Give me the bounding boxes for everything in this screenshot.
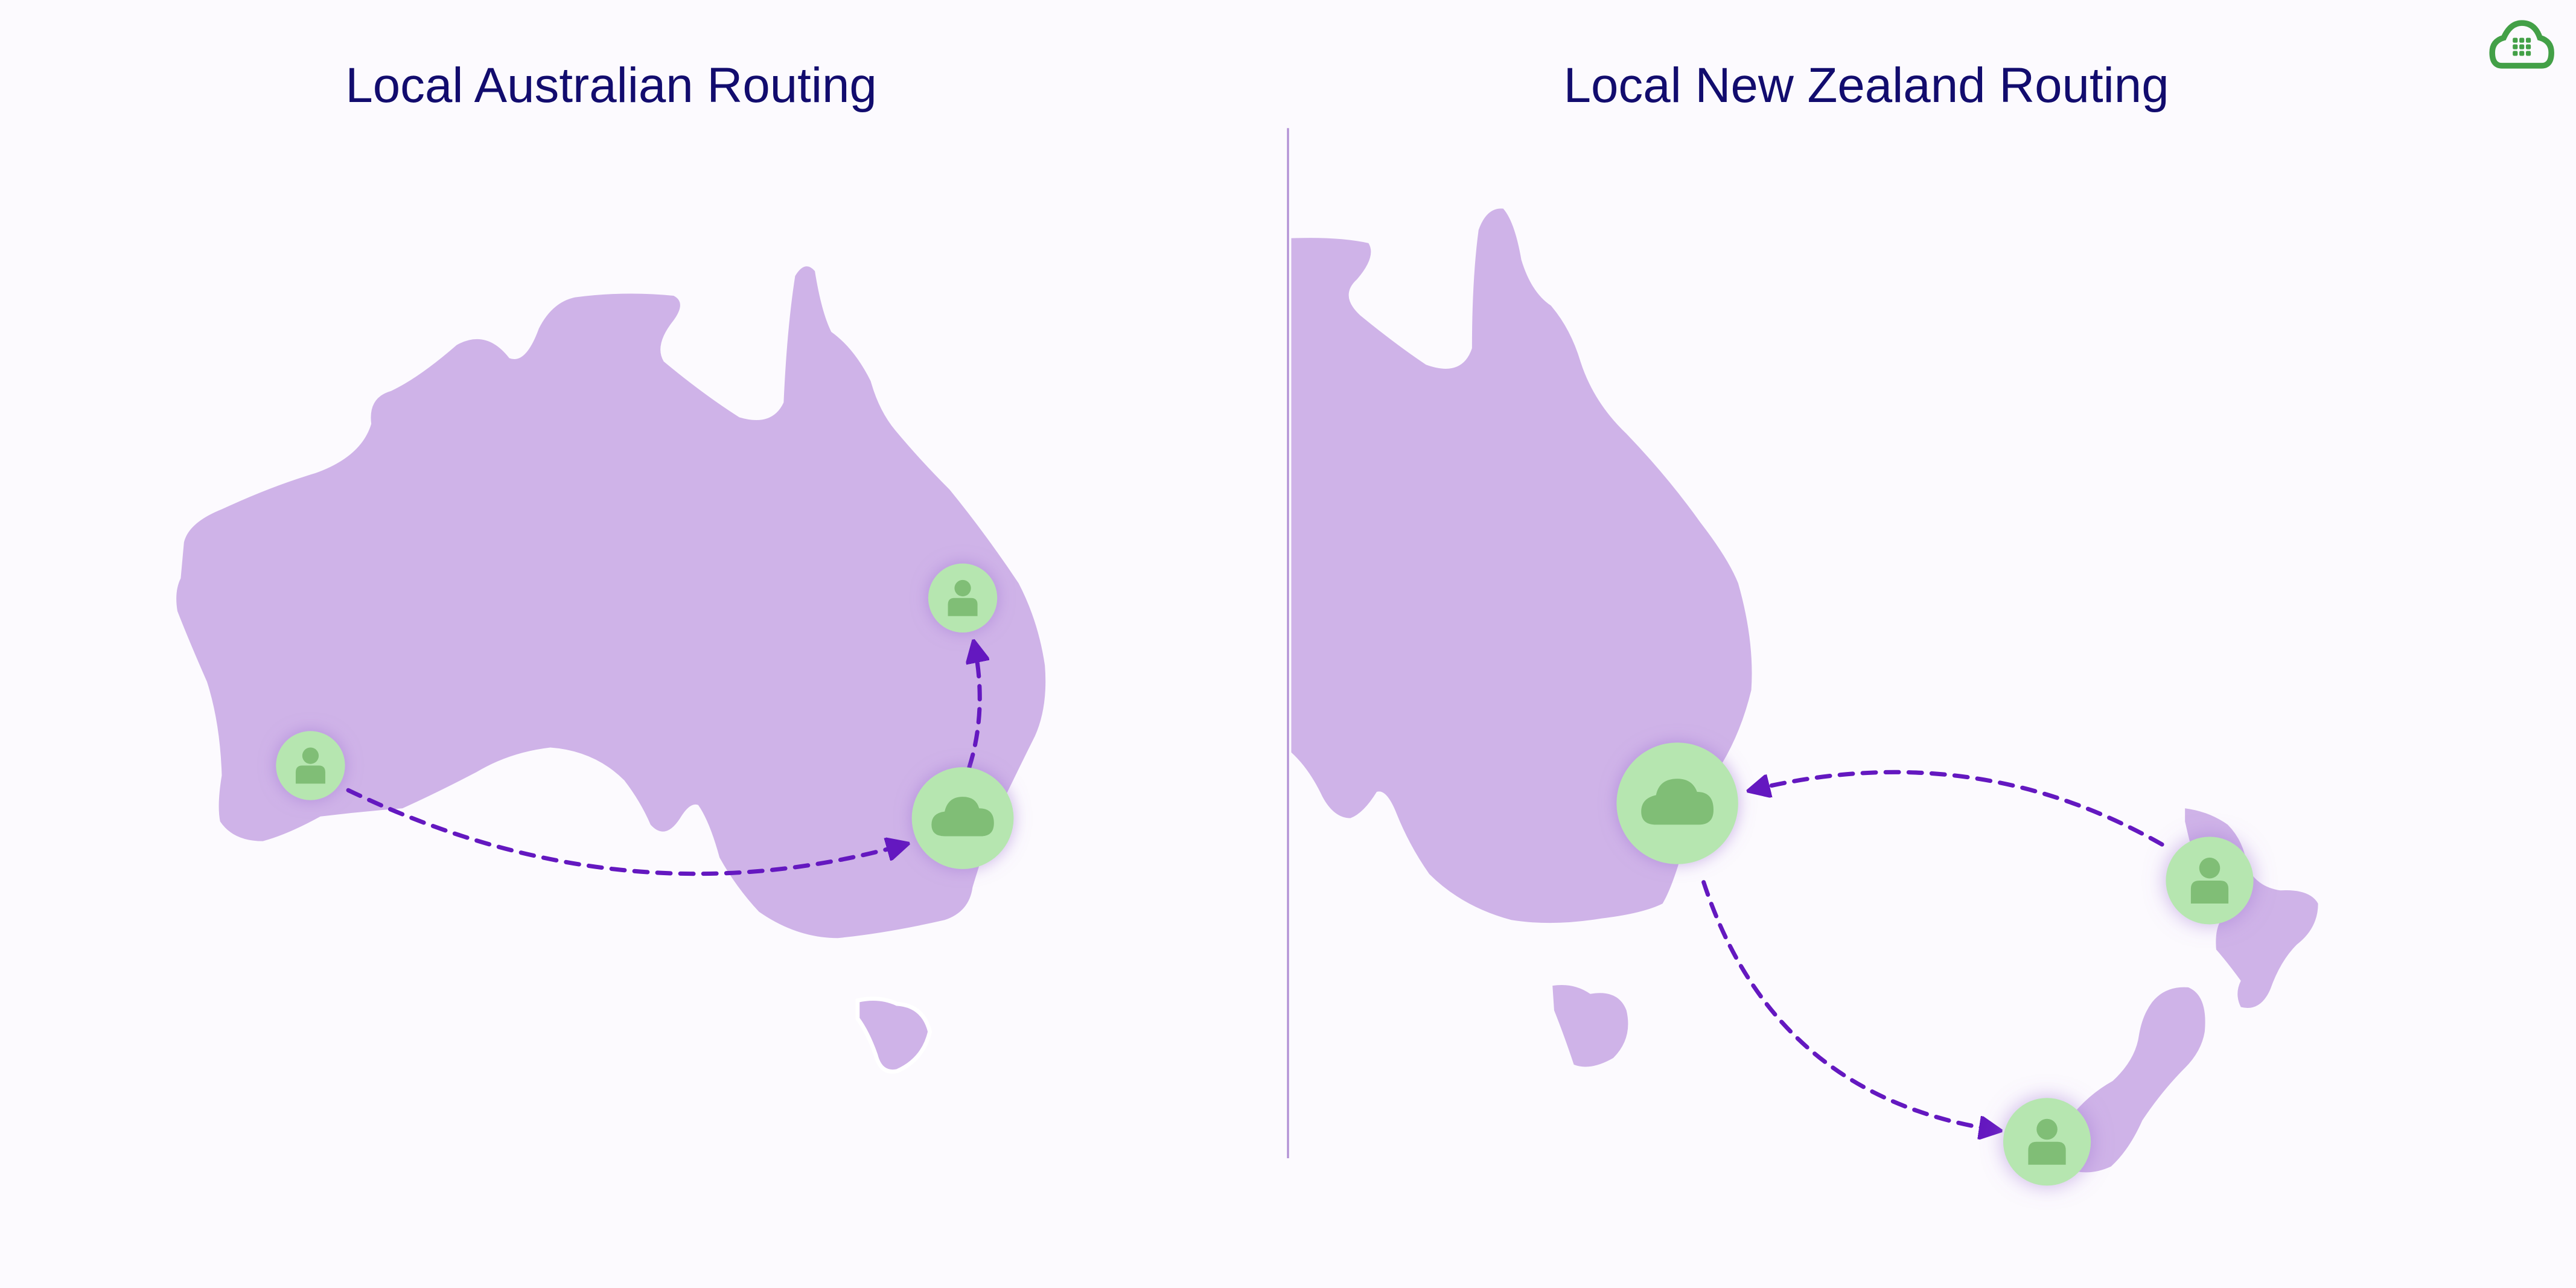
icon: cloud Sydney left xyxy=(912,767,1013,869)
arrow: Sydney to Brisbane xyxy=(969,644,980,767)
icon: cloud Sydney right xyxy=(1616,742,1738,864)
island: NZ South xyxy=(2060,987,2205,1172)
island: Tasmania left xyxy=(858,999,930,1071)
title: Local New Zealand Routing: Local New Zealand Routing xyxy=(1564,58,2169,113)
arrow: NZ North to Sydney xyxy=(1752,772,2162,844)
icon: user NZ North xyxy=(2166,837,2254,925)
icon: user NZ South xyxy=(2003,1098,2091,1185)
icon: user Brisbane xyxy=(928,564,997,633)
island: Tasmania right xyxy=(1552,985,1628,1066)
arrow: Perth to Sydney xyxy=(348,790,905,874)
panel: Australia map left xyxy=(176,266,1045,1071)
panel: Australia + New Zealand map right xyxy=(1291,209,2318,1172)
arrow: Sydney to NZ South xyxy=(1704,882,1998,1130)
logo: green cloud xyxy=(2492,23,2551,66)
island: NZ North xyxy=(2185,808,2318,1008)
icon: user Perth xyxy=(276,731,345,800)
title: Local Australian Routing: Local Australian Routing xyxy=(345,58,877,113)
